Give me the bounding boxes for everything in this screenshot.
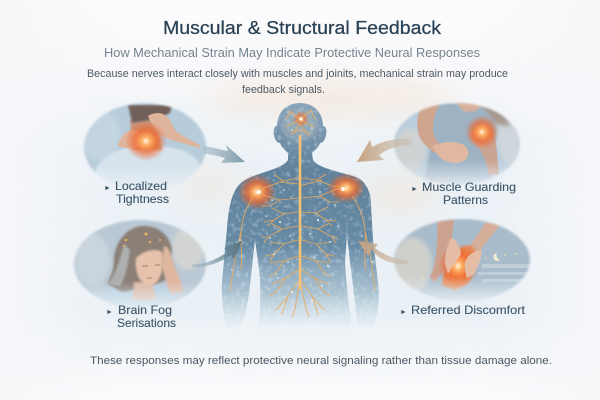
label: referred discomfort: Referred Discomfort — [411, 303, 526, 317]
label: brain fog sensations: Brain Fog — [118, 303, 172, 317]
moon and stars — [493, 253, 500, 261]
central figure: back with nerve network — [222, 103, 379, 324]
neck — [132, 282, 156, 300]
title: Muscular & Structural Feedback — [163, 18, 442, 38]
closing note: These responses may reflect protective neural signaling rather than tissue damage alone. — [90, 355, 552, 367]
label: brain fog sensations: Serisations — [117, 316, 176, 330]
label: muscle guarding patterns: Muscle Guarding — [422, 180, 516, 194]
mist over lower figure — [200, 324, 400, 352]
shoulder glow right — [327, 173, 365, 203]
forearms — [430, 220, 454, 282]
intro text: feedback signals. — [242, 84, 325, 96]
vignette: brain fog — [70, 218, 242, 330]
arrow to figure — [357, 139, 412, 162]
vignette: neck pain — [80, 100, 245, 206]
label: localized tightness — [104, 179, 169, 206]
shirt — [95, 146, 200, 186]
label: localized tightness: Localized — [115, 179, 167, 193]
leg and knee — [442, 245, 476, 290]
chin and neck — [456, 102, 484, 112]
hair — [480, 103, 510, 127]
label: muscle guarding patterns: ► — [411, 186, 418, 193]
hand on chest — [432, 142, 468, 163]
subtitle: How Mechanical Strain May Indicate Protective Neural Responses — [104, 46, 480, 60]
label: localized tightness: ► — [104, 185, 111, 192]
label: muscle guarding patterns: Patterns — [443, 193, 488, 207]
arrow to figure — [204, 145, 245, 163]
label: referred discomfort: ► — [400, 309, 407, 316]
intro text — [87, 68, 508, 96]
spinal cord — [299, 136, 301, 288]
vignette: referred discomfort — [358, 218, 535, 317]
label: localized tightness: Tightness — [116, 192, 169, 206]
face — [136, 250, 163, 285]
hair — [108, 226, 172, 292]
label: brain fog sensations: ► — [106, 309, 113, 316]
nerve sparkles — [231, 111, 373, 301]
nerve branches — [230, 110, 375, 317]
shoulder glow left — [238, 174, 276, 210]
arrow to figure — [358, 241, 408, 264]
shirt torso — [424, 103, 496, 185]
body silhouette — [222, 103, 379, 324]
vignette: muscle guarding — [357, 100, 525, 207]
right shoulder and arm — [470, 126, 499, 175]
hands — [445, 238, 461, 274]
neck and hair — [130, 120, 162, 150]
hands — [148, 113, 201, 148]
arrow to figure — [192, 241, 242, 267]
label: brain fog sensations — [106, 303, 176, 330]
head glow — [293, 111, 309, 127]
hand at temple — [161, 246, 183, 294]
intro text: Because nerves interact closely with muscles and joinits, mechanical strain may produce — [87, 68, 508, 80]
left upper arm — [417, 104, 442, 153]
shoulders — [112, 286, 166, 290]
label: muscle guarding patterns — [411, 180, 516, 207]
sparkles — [123, 232, 161, 247]
